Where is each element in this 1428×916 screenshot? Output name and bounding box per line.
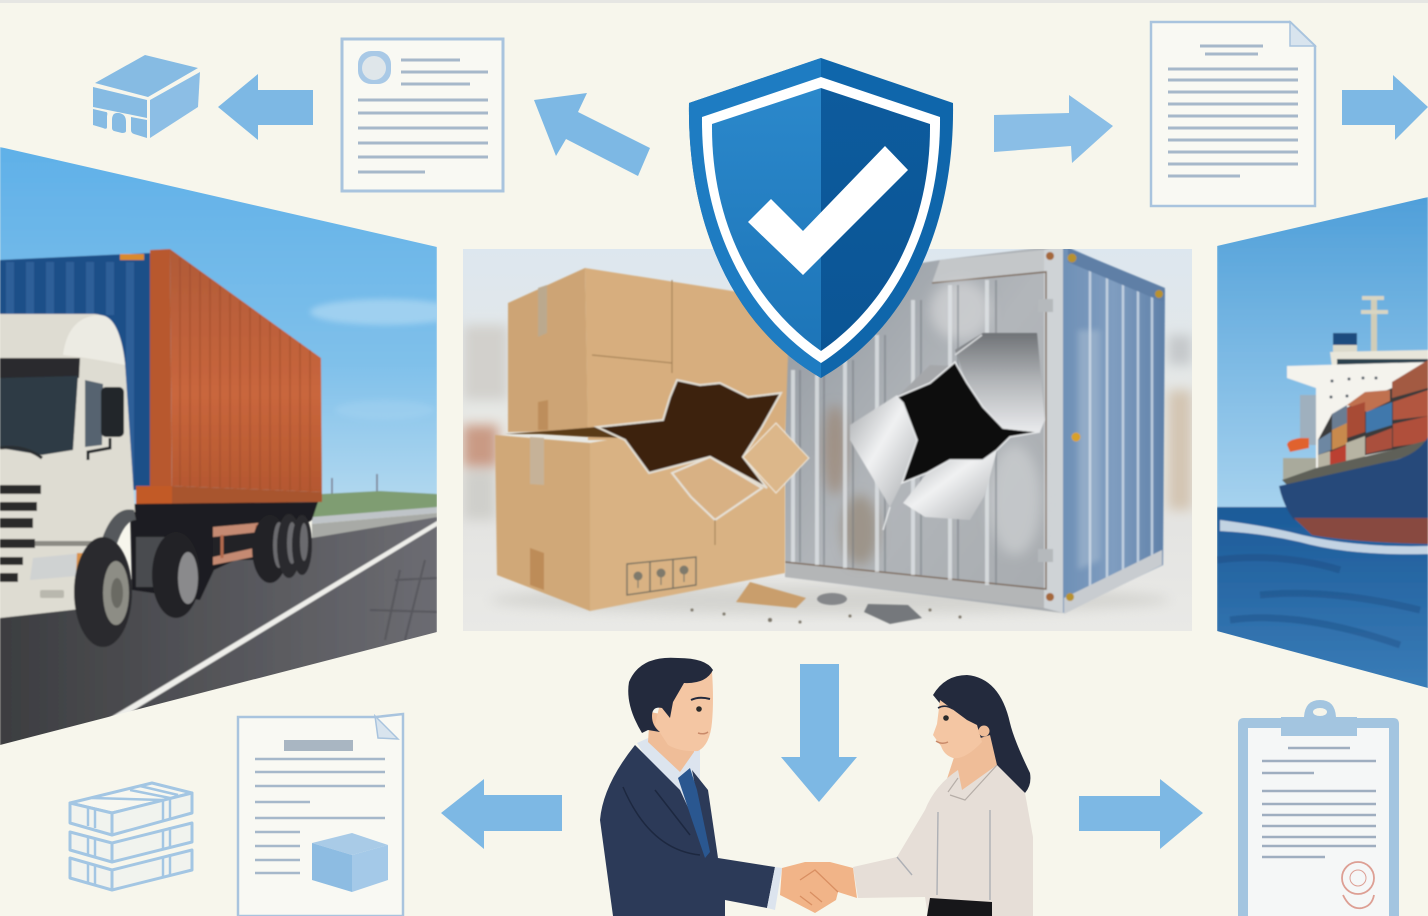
ship superstructure — [1283, 296, 1428, 480]
document: bottom with box — [238, 714, 403, 916]
man suit — [600, 745, 775, 916]
stains — [823, 280, 1041, 565]
slit between the boxes — [506, 426, 618, 438]
blurred warehouse background — [463, 325, 1192, 520]
truck: orange container side — [136, 249, 322, 504]
red seal stamp — [1342, 862, 1374, 908]
woman hair back — [933, 675, 1030, 793]
icon: stacked boxes — [70, 783, 192, 890]
metal dents and hole — [850, 333, 1045, 530]
man head and hair — [655, 672, 713, 751]
truck: white cab — [0, 314, 136, 618]
icon: shield with checkmark — [689, 58, 953, 378]
fragile icon labels — [627, 557, 696, 595]
arrow: left to box — [218, 74, 313, 140]
check mark — [748, 146, 908, 275]
road surface — [0, 517, 437, 750]
lower box — [495, 435, 590, 611]
woman shirt — [853, 765, 1033, 916]
arrow: right at page edge — [1342, 75, 1428, 140]
figure: businesswoman shaking hands — [853, 675, 1033, 916]
small box icon — [312, 833, 388, 892]
roadside trees and guardrail — [312, 474, 437, 540]
ship hull — [1279, 437, 1428, 544]
woman neck — [945, 735, 997, 795]
hole — [597, 380, 781, 488]
frame — [1044, 245, 1063, 613]
panel: damaged cargo photo — [463, 245, 1192, 631]
ship railing — [1282, 440, 1428, 488]
truck: front wheel — [74, 537, 132, 647]
document: top left profile form — [342, 39, 503, 191]
panel: truck on highway photo — [0, 147, 460, 750]
upper box — [508, 268, 588, 432]
truck: chassis and wheels — [130, 502, 318, 618]
ship cargo containers — [1318, 360, 1428, 470]
truck: blue container — [0, 253, 152, 490]
document: clipboard with seal — [1238, 700, 1399, 916]
arrow: left to document — [441, 779, 562, 849]
ship wake — [1220, 520, 1428, 554]
man shirt and neck — [637, 735, 710, 853]
front corrugation — [793, 280, 987, 585]
figure: businessman shaking hands — [600, 658, 782, 916]
hardware — [1072, 432, 1080, 442]
damaged metal container — [785, 245, 1165, 614]
arrow: right to document — [994, 95, 1113, 163]
debris on floor — [690, 582, 962, 624]
panel: container ship photo — [1217, 197, 1428, 692]
torn cardboard boxes — [495, 268, 809, 611]
woman head — [933, 700, 982, 758]
lane marking — [109, 520, 437, 717]
arrow: down from photo — [781, 664, 857, 802]
arrow: right to clipboard — [1079, 779, 1203, 849]
icon: package box — [93, 55, 200, 138]
arrow: up left — [534, 93, 650, 176]
document: top right — [1151, 22, 1315, 206]
icon: handshake — [780, 862, 857, 913]
woman skirt — [927, 898, 992, 916]
side corrugation — [1090, 268, 1152, 592]
